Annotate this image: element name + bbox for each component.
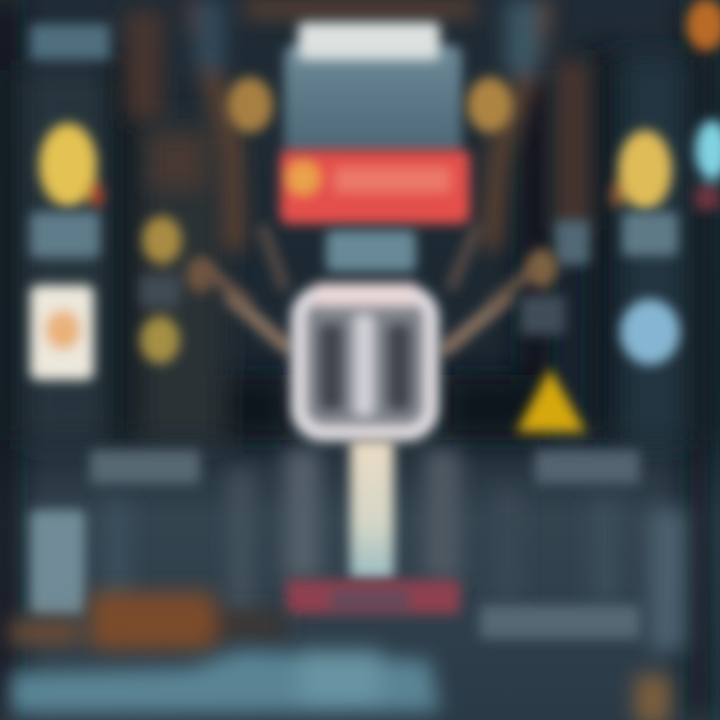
central stem	[350, 440, 394, 580]
left white card	[30, 285, 94, 380]
central white panel	[298, 283, 432, 434]
background: brown arches at top	[125, 0, 590, 250]
icon: right cyan badge	[695, 120, 720, 210]
icon: left yellow badge	[39, 123, 104, 209]
top amber lights	[227, 0, 720, 133]
brown block	[10, 592, 285, 650]
right caption	[535, 450, 640, 484]
top centre panel	[284, 45, 462, 155]
red banner	[280, 150, 470, 224]
icon: right yellow badge	[610, 130, 672, 210]
right amber detail	[520, 248, 565, 335]
lower left column	[30, 510, 85, 615]
lower right caption	[480, 605, 640, 639]
left caption	[90, 450, 200, 484]
right text block	[555, 212, 678, 265]
right blue card	[620, 299, 680, 365]
lower right orange glow	[635, 675, 670, 720]
red base strip	[286, 580, 460, 614]
connector lines to central panel	[200, 225, 540, 352]
left amber dots	[140, 216, 214, 364]
left text block	[30, 212, 100, 258]
left top label	[30, 24, 110, 60]
sub banner	[326, 230, 416, 272]
title bar	[298, 22, 440, 60]
bottom blue band	[10, 650, 440, 714]
background: floor streaks	[105, 450, 685, 650]
icon: yellow warning triangle	[516, 368, 586, 432]
